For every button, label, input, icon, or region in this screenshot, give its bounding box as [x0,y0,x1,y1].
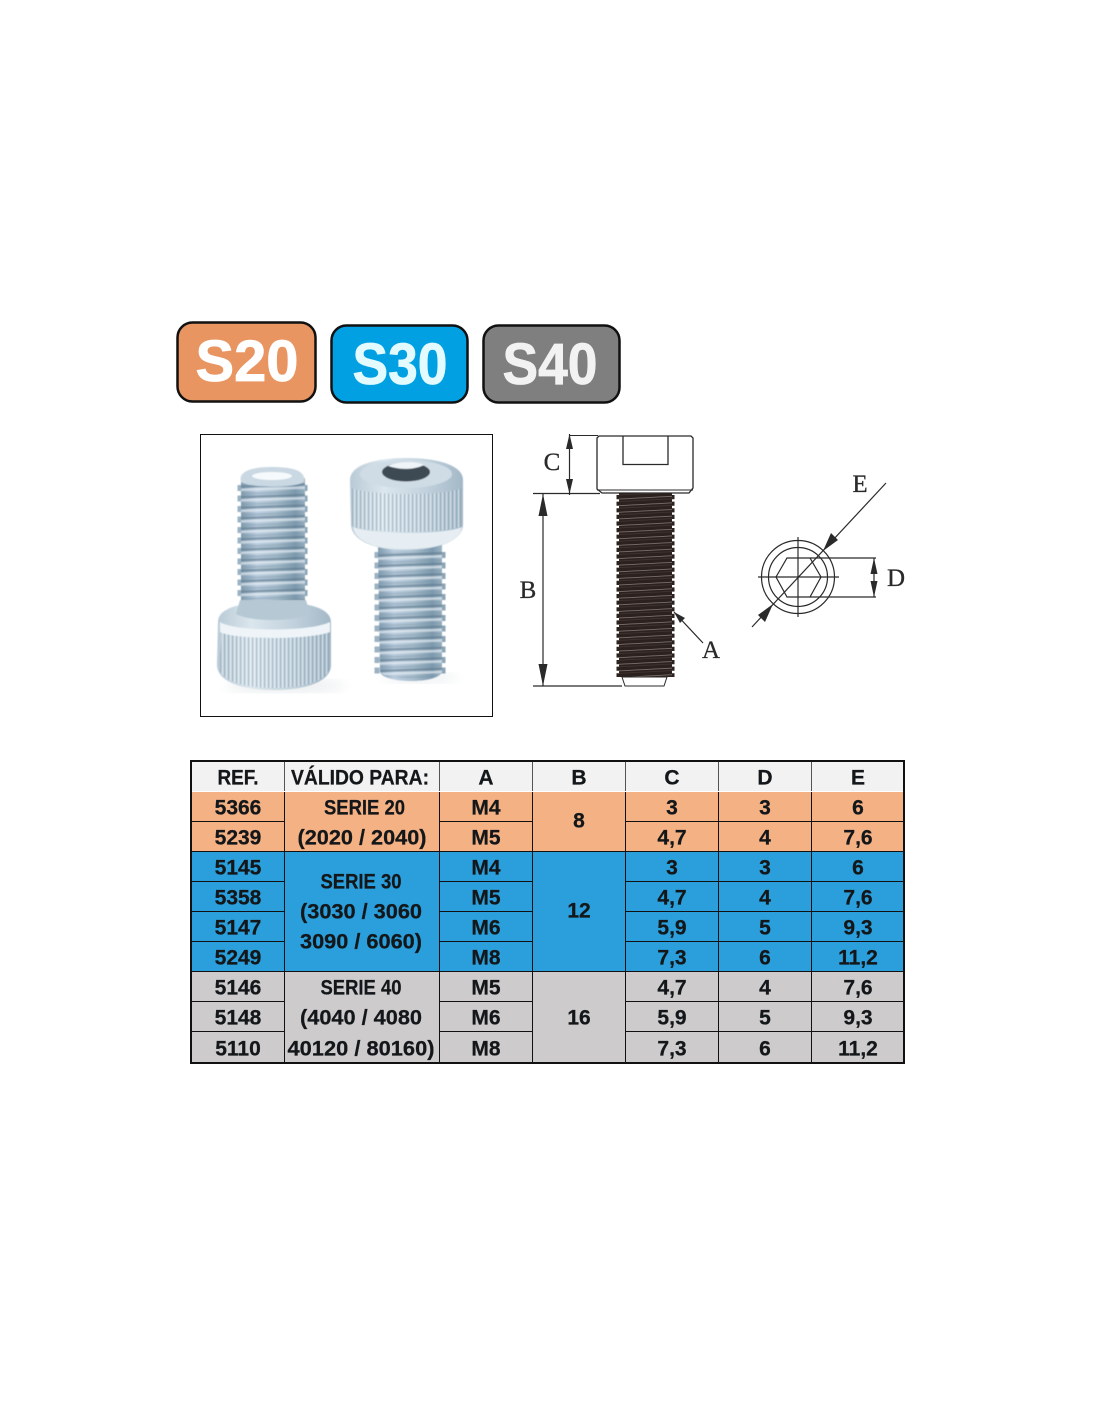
series 20 rows: 4 [759,826,771,849]
series 30 rows: M6 [471,916,501,939]
series 20 rows: 6 [852,796,864,819]
series 30 rows: 7,3 [657,946,687,969]
dimension B [520,494,622,686]
series 40 rows: 40120 / 80160) [288,1037,434,1060]
series 30 rows: 4,7 [657,886,687,909]
series 30 rows: M4 [471,856,501,879]
series 30 rows: 5358 [215,886,262,909]
series 40 rows: M8 [471,1037,501,1060]
technical drawing: end view of screw: D [887,565,905,592]
series 20 rows: 7,6 [843,826,873,849]
screw: right, head up [350,458,463,681]
technical drawing: end view of screw: E [852,471,868,498]
series 40 rows: 5146 [215,976,261,999]
specification table [191,761,904,1063]
series 30 rows: 4 [759,886,771,909]
series 20 rows: SERIE 20 [324,796,405,819]
series 30 rows: 5249 [215,946,261,969]
dimension B: B [520,577,536,604]
series 30 rows: SERIE 30 [320,870,402,893]
badge: S30: S30 [352,332,448,397]
series 20 rows: 3 [666,796,678,819]
series 30 rows: 5 [759,916,771,939]
series 30 rows: 6 [852,856,864,879]
technical drawing: end view of screw [752,471,905,627]
series 40 rows: 4 [759,976,771,999]
series 40 rows [215,976,878,1060]
series 40 rows: 5 [759,1006,771,1029]
series 20 rows: M5 [471,826,501,849]
series 40 rows: 9,3 [843,1006,873,1029]
dimension A: A [702,637,720,664]
series 40 rows: M5 [471,976,501,999]
badge: S40: S40 [502,332,598,397]
series 20 rows: 5366 [215,796,261,819]
series 20 rows: 3 [759,796,771,819]
screw head outline [597,436,693,493]
series 30 rows: 5,9 [657,916,687,939]
series 40 rows: 5,9 [657,1006,687,1029]
series 40 rows: (4040 / 4080 [300,1006,422,1029]
series 30 rows: 3090 / 6060) [300,930,422,953]
header row: B [571,766,587,789]
series 20 rows: M4 [471,796,501,819]
header row [218,766,865,789]
header row: D [757,766,773,789]
product photo: two socket head screws [200,434,492,716]
series 30 rows: 12 [567,899,591,922]
row fills [191,761,904,1063]
series 40 rows: 16 [567,1006,591,1029]
series 40 rows: 11,2 [838,1037,878,1060]
dimension C [544,434,598,495]
series 30 rows: 3 [759,856,771,879]
grid lines [191,761,904,1063]
badge: S30 [332,326,468,402]
badge: S20: S20 [196,329,298,394]
series 30 rows: M5 [471,886,501,909]
series 40 rows: M6 [471,1006,501,1029]
series 20 rows [215,796,873,849]
technical drawing: side view of screw [520,434,720,686]
series 30 rows: 6 [759,946,771,969]
series 30 rows: 7,6 [843,886,873,909]
series 40 rows: 6 [759,1037,771,1060]
header row: A [478,766,494,789]
dimension C: C [544,449,560,476]
series 40 rows: SERIE 40 [320,976,402,999]
series 30 rows: 11,2 [838,946,878,969]
series 30 rows: 3 [666,856,678,879]
badge: S40 [484,326,620,402]
threaded shank [619,493,672,686]
series 20 rows: 8 [573,809,585,832]
header row: C [664,766,680,789]
hex socket outline [623,436,668,464]
series 40 rows: 7,6 [843,976,873,999]
series 30 rows: M8 [471,946,501,969]
series 40 rows: 5148 [215,1006,262,1029]
series 30 rows: 5147 [215,916,261,939]
header row: VÁLIDO PARA: [291,766,429,789]
badge: S20 [178,322,316,402]
series 20 rows: 5239 [215,826,261,849]
series 20 rows: (2020 / 2040) [298,826,426,849]
screw: left, head down [217,467,331,690]
series 20 rows: 4,7 [657,826,687,849]
series 30 rows: 5145 [215,856,262,879]
series 30 rows: (3030 / 3060 [300,900,422,923]
series 40 rows: 7,3 [657,1037,687,1060]
series 40 rows: 5110 [215,1037,261,1060]
series 30 rows [215,856,878,969]
header row: E [851,766,865,789]
header row: REF. [218,766,258,789]
dimension A [674,612,720,664]
series 30 rows: 9,3 [843,916,873,939]
series 40 rows: 4,7 [657,976,687,999]
